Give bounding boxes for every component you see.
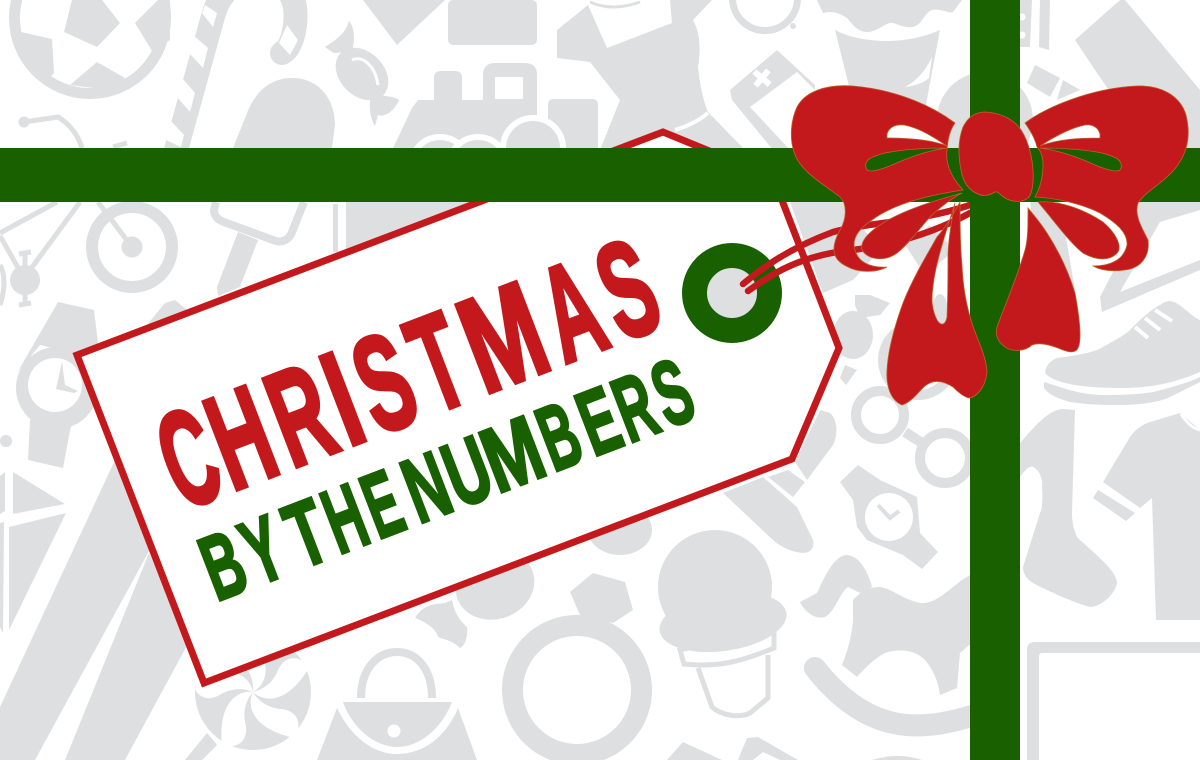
red bow bbox=[791, 86, 1188, 405]
icon: sneaker upper outline bbox=[1100, 202, 1200, 312]
bow: inner left fold bbox=[862, 193, 962, 259]
icon: cupcake bbox=[817, 0, 962, 110]
tag subtitle: by the numbers: B bbox=[524, 383, 595, 491]
tag string bbox=[743, 205, 970, 291]
icon: wrapped candy bbox=[325, 21, 399, 126]
icon: diamond ring bbox=[502, 573, 652, 760]
icon: peppermint lollipop bbox=[185, 630, 311, 760]
icon: gift box strip behind tag bbox=[333, 202, 500, 260]
icon: candy cane bbox=[166, 0, 298, 150]
bow: center knot bbox=[959, 112, 1033, 201]
bow: left loop bbox=[791, 86, 963, 271]
gray shapes under bow bbox=[790, 200, 1075, 330]
tag title: Christmas: I bbox=[304, 323, 381, 474]
icon: handbag bbox=[317, 652, 477, 760]
tag title: Christmas: C bbox=[138, 378, 239, 538]
tag subtitle: by the numbers: B bbox=[187, 511, 260, 620]
icon: shirt dress bbox=[557, 0, 745, 150]
gray shape behind band left of bow knot bbox=[937, 72, 1033, 168]
icon: wrapped candy lower bbox=[415, 539, 544, 648]
icon: gift box outline bottom right bbox=[1027, 642, 1200, 760]
icon: diagonal gift panel top right bbox=[1075, 0, 1200, 150]
ribbon: vertical band bbox=[970, 0, 1020, 760]
tag title: Christmas: R bbox=[247, 334, 353, 496]
icon: ice cream cone bbox=[656, 530, 790, 716]
tag title: Christmas: T bbox=[389, 283, 486, 441]
gift tag bbox=[77, 132, 970, 683]
candy blob bbox=[588, 505, 652, 555]
tag title: Christmas: M bbox=[440, 252, 566, 422]
tag subtitle: by the numbers: T bbox=[272, 480, 342, 588]
icon: right top stripes bbox=[1018, 0, 1080, 100]
icon: wristwatch left bbox=[16, 302, 100, 468]
tag subtitle: by the numbers: U bbox=[429, 417, 505, 527]
tag body bbox=[77, 132, 839, 683]
icon: soccer ball bbox=[14, 0, 170, 94]
icon: top diamond box bbox=[363, 0, 537, 45]
icon: handheld console bbox=[730, 50, 820, 150]
tag subtitle: by the numbers: E bbox=[349, 451, 417, 558]
tag title: Christmas: S bbox=[334, 303, 435, 463]
icon: rattle rings bbox=[856, 325, 970, 483]
icon: sneaker bbox=[1044, 301, 1200, 405]
tag subtitle: by the numbers: R bbox=[600, 354, 671, 462]
tag title: Christmas: A bbox=[520, 230, 623, 391]
gray shape near tag edge bbox=[147, 300, 190, 325]
small shape bbox=[0, 435, 12, 447]
tag subtitle: by the numbers: N bbox=[389, 433, 464, 543]
tag eyelet ring bbox=[694, 256, 770, 330]
icon: magnifier ring bbox=[732, 0, 798, 30]
bow: right tail bbox=[996, 208, 1080, 352]
icon: big diagonal bars bbox=[0, 460, 190, 760]
icon: rocking horse bbox=[800, 555, 975, 725]
tag subtitle: by the numbers: E bbox=[564, 368, 634, 476]
icon: popsicle bbox=[214, 78, 335, 296]
tag title: Christmas: S bbox=[577, 210, 678, 369]
bow: inner right fold bbox=[1038, 202, 1119, 259]
tag title: Christmas: H bbox=[188, 357, 294, 519]
icon: bicycle bbox=[0, 116, 172, 305]
icons: bottom edge fragments bbox=[667, 737, 922, 760]
icon: t-shirt bbox=[1093, 413, 1200, 620]
tag subtitle: by the numbers: S bbox=[639, 340, 707, 447]
bow: right loop bbox=[1025, 86, 1188, 271]
icon: wristwatch right bbox=[840, 465, 938, 569]
tag subtitle: by the numbers: M bbox=[468, 397, 557, 513]
icon: candy by bow bbox=[833, 295, 890, 385]
icon: carrot knife bbox=[723, 410, 836, 553]
icon: kite bbox=[0, 472, 66, 633]
tag subtitle: by the numbers: H bbox=[309, 465, 381, 573]
tag subtitle: by the numbers: Y bbox=[228, 497, 297, 605]
ribbon: horizontal band bbox=[0, 148, 1200, 202]
icon: toy train bbox=[393, 63, 598, 195]
icon: stocking bbox=[1020, 409, 1117, 607]
bow: left tail bbox=[887, 202, 987, 405]
